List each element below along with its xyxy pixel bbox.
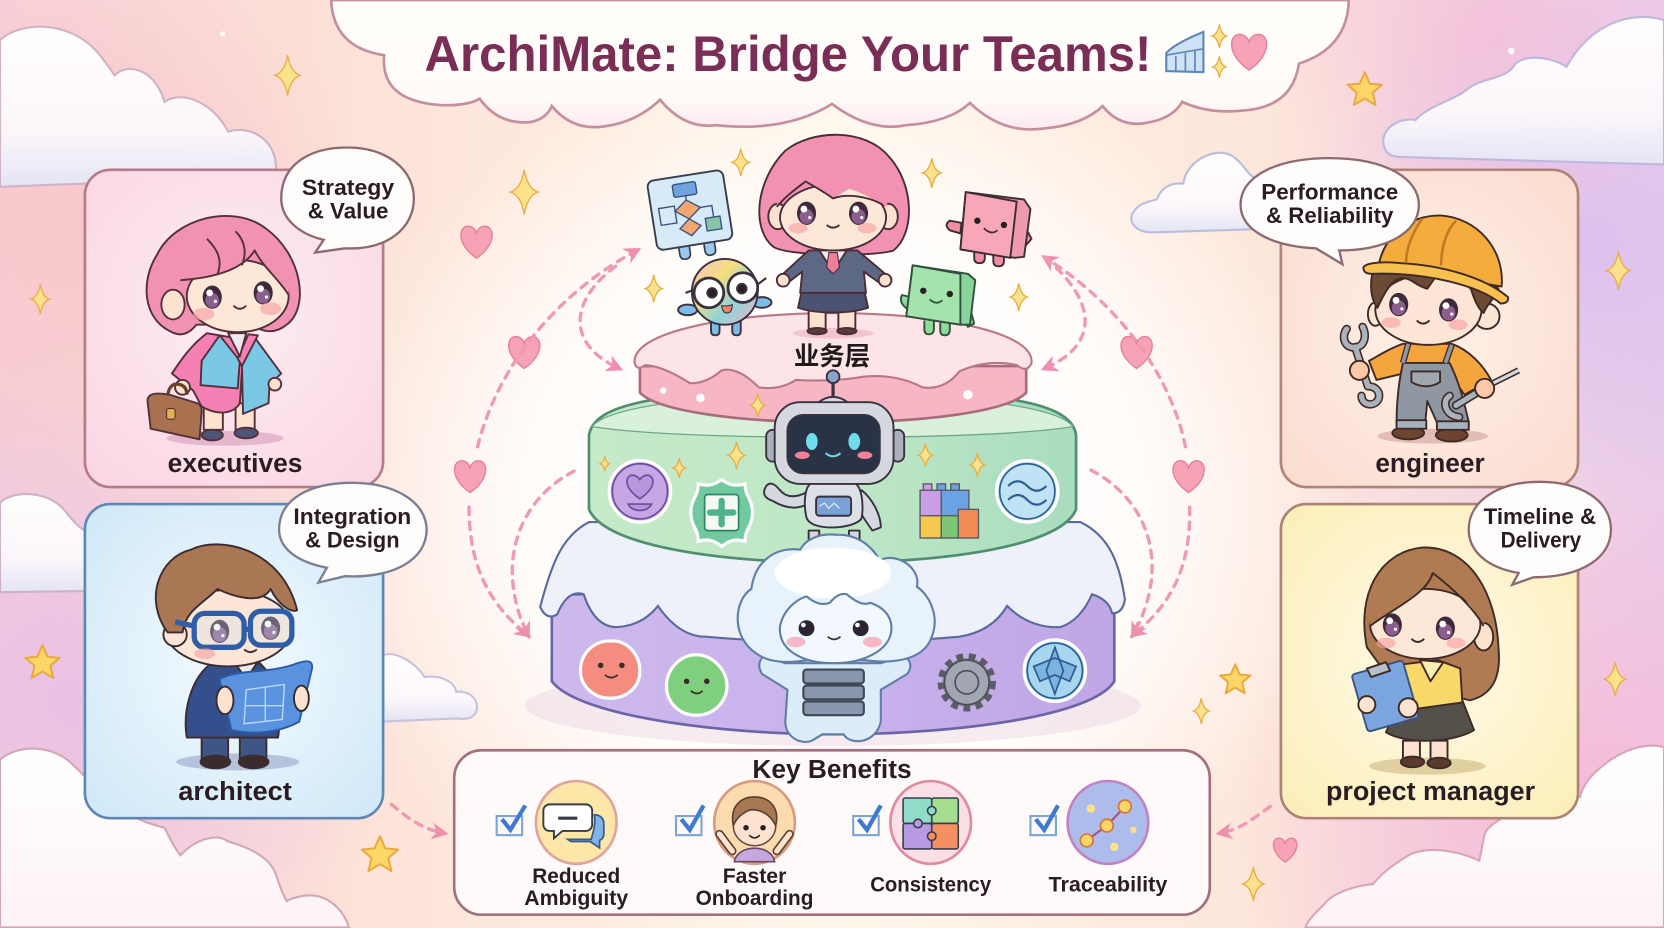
cake: middle tier (application) xyxy=(589,391,1076,562)
speech bubble: Strategy & Value xyxy=(281,148,414,253)
icon: title arch, sparkles and heart xyxy=(1166,24,1267,77)
icon: flowchart card xyxy=(647,170,735,263)
benefit: faster onboarding: Onboarding xyxy=(696,887,813,910)
character: business girl on cake xyxy=(759,135,909,339)
cloud: left middle xyxy=(0,494,85,592)
speech bubble: Strategy & Value: & Value xyxy=(308,199,388,224)
benefit: traceability: Traceability xyxy=(1048,873,1168,896)
panel: key benefits xyxy=(454,750,1210,915)
icon: green plus frame xyxy=(691,480,752,547)
icon: blue wave circle xyxy=(996,461,1058,522)
benefit: reduced ambiguity: Ambiguity xyxy=(524,887,628,910)
label: executives: executives xyxy=(168,450,302,478)
benefit: reduced ambiguity xyxy=(497,781,628,910)
hearts xyxy=(455,226,1297,862)
character: cloud server xyxy=(738,535,935,742)
character: robot xyxy=(764,370,904,541)
character: engineer xyxy=(1344,215,1519,444)
title: ArchiMate: Bridge Your Teams! xyxy=(424,26,1151,82)
cloud: bottom right xyxy=(1305,746,1664,927)
benefit: traceability xyxy=(1030,781,1168,896)
speech bubble: Performance & Reliability: & Reliability xyxy=(1266,203,1394,228)
panel: architect xyxy=(85,504,383,818)
benefit: consistency xyxy=(853,781,991,896)
title cloud xyxy=(331,0,1349,129)
speech bubble: Integration & Design: Integration xyxy=(293,504,411,529)
icon: green blob xyxy=(666,655,727,715)
dashed arrows between stakeholders and cake xyxy=(392,250,1270,833)
character: architect xyxy=(156,544,312,770)
cloud: middle right xyxy=(1131,153,1289,232)
cloud: small beside architect xyxy=(382,654,477,722)
panel: executives xyxy=(85,170,383,487)
benefit: consistency: Consistency xyxy=(870,873,991,896)
cake: top tier (business) xyxy=(635,313,1032,422)
heading: key benefits: Key Benefits xyxy=(752,756,912,784)
character: green box xyxy=(901,265,975,335)
label: architect: architect xyxy=(178,778,292,806)
character: project manager xyxy=(1351,548,1499,775)
speech bubble: Timeline & Delivery: Timeline & xyxy=(1484,504,1596,529)
benefit: faster onboarding: Faster xyxy=(723,865,786,888)
speech bubble: Integration & Design: & Design xyxy=(305,528,400,553)
label: project manager: project manager xyxy=(1326,778,1535,806)
speech bubble: Performance & Reliability: Performance xyxy=(1261,180,1398,205)
speech bubble: Strategy & Value: Strategy xyxy=(302,175,395,200)
icon: coral blob xyxy=(580,641,640,698)
cloud: top left xyxy=(0,27,276,187)
icon: blue network circle xyxy=(1024,640,1086,701)
sparkles on cake xyxy=(600,149,1027,478)
character: executive xyxy=(147,216,300,446)
speech bubble: Performance & Reliability xyxy=(1241,158,1419,264)
icon: gear xyxy=(942,658,991,707)
label: engineer: engineer xyxy=(1375,450,1485,478)
cloud: top right xyxy=(1383,17,1664,164)
cake: bottom tier (technology) xyxy=(525,522,1141,746)
cloud: bottom left xyxy=(0,749,349,927)
icon: purple heart circle xyxy=(609,461,671,522)
icon: puzzle blocks xyxy=(920,484,978,538)
character: glasses egg xyxy=(678,259,772,335)
label: business layer: 业务层 xyxy=(794,343,870,371)
panel: project manager xyxy=(1281,504,1578,818)
benefit: reduced ambiguity: Reduced xyxy=(532,865,620,888)
speech bubble: Timeline & Delivery: Delivery xyxy=(1501,528,1582,553)
character: pink box xyxy=(947,192,1032,266)
speech bubble: Timeline & Delivery xyxy=(1469,482,1611,585)
panel: engineer xyxy=(1281,170,1578,487)
speech bubble: Integration & Design xyxy=(279,483,427,583)
benefit: faster onboarding xyxy=(676,781,813,910)
